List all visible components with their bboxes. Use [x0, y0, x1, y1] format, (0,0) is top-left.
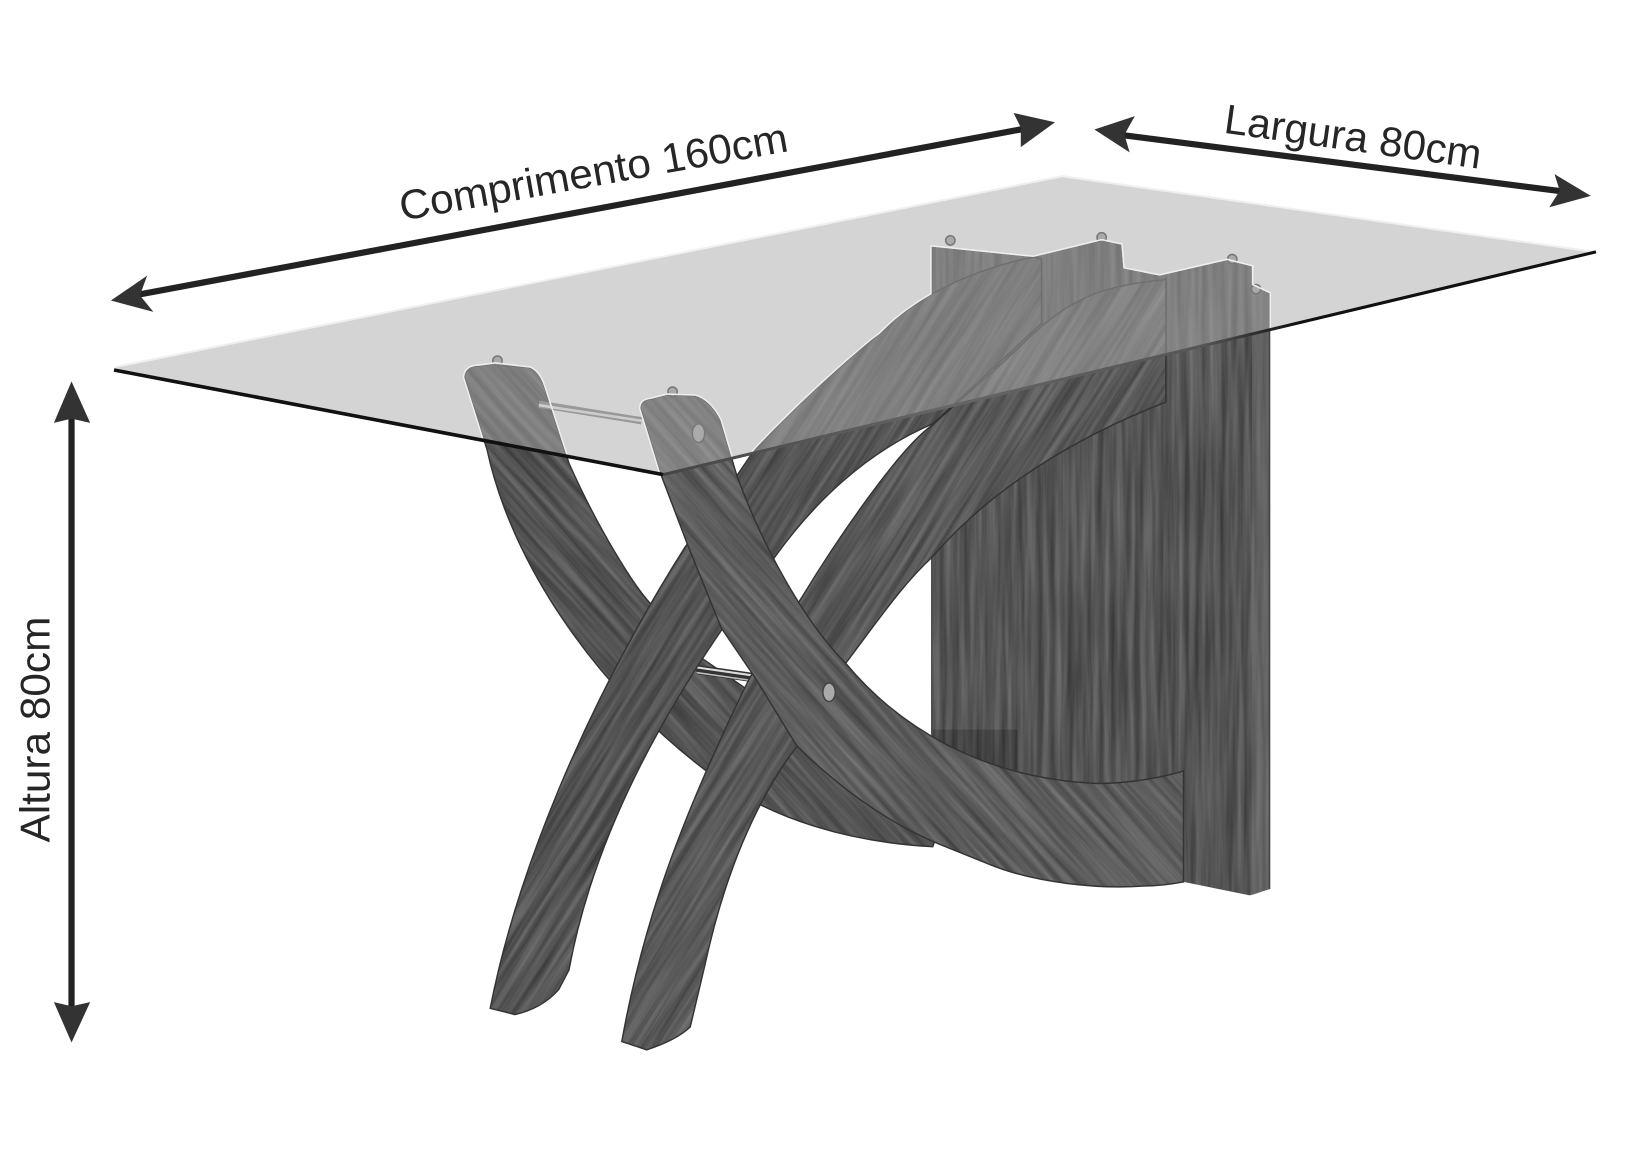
front descending arch — [640, 395, 1184, 887]
bolts — [692, 424, 835, 702]
support pegs — [493, 233, 1261, 396]
label: largura: Largura 80cm — [1222, 95, 1485, 178]
table illustration — [114, 176, 1596, 1050]
lower chrome rod — [696, 667, 754, 681]
label: altura: Altura 80cm — [12, 617, 59, 843]
dimension arrow: comprimento — [111, 113, 1055, 312]
label: comprimento: Comprimento 160cm — [395, 114, 791, 230]
dimension arrow: altura — [54, 381, 90, 1043]
glass table top — [114, 175, 1596, 476]
rear rising arch and leg — [490, 257, 1042, 1015]
upper chrome rod — [539, 404, 642, 421]
table base: rear vertical wood panel — [932, 240, 1270, 895]
front rising arch and leg — [622, 279, 1166, 1050]
rear descending arch — [464, 364, 938, 847]
dimension arrow: largura — [1094, 116, 1591, 207]
